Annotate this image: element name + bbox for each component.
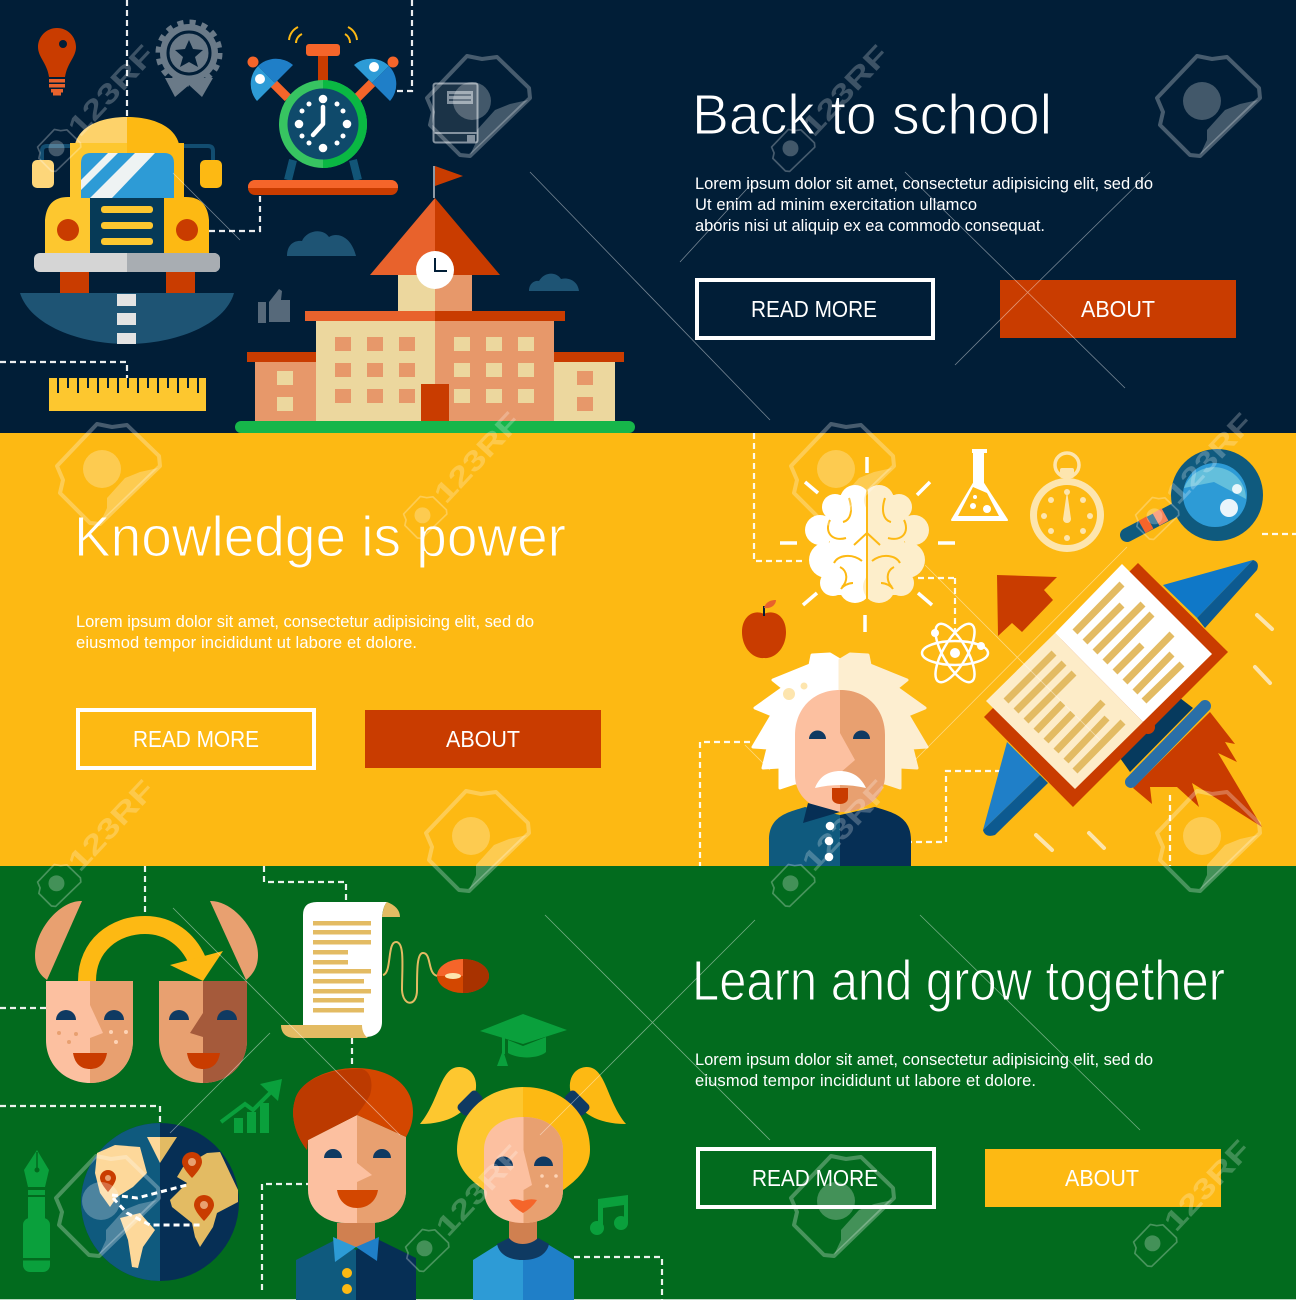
icon: clouds [287, 231, 579, 291]
watermark text: 123RF [1160, 407, 1259, 510]
icon: brain [780, 457, 955, 632]
icon: globe [81, 1123, 239, 1281]
icon: document scroll [281, 902, 400, 1038]
panel: back to school [0, 0, 1296, 433]
button: read more [698, 1149, 934, 1207]
icon: up arrow [997, 575, 1057, 636]
button: read more: READ MORE [133, 726, 259, 752]
icon: ruler [49, 378, 206, 411]
watermark text: 123RF [428, 406, 527, 509]
heading: back to school: Back to school [692, 83, 1052, 147]
icon: comedy and tragedy masks [35, 901, 258, 1083]
icon: flask [952, 449, 1007, 520]
button: about [365, 710, 601, 768]
icon: thumbs up [258, 289, 290, 323]
illustration: boy [293, 1068, 416, 1300]
icon: fountain pen [23, 1150, 50, 1272]
button: read more [697, 280, 933, 338]
button: read more: READ MORE [751, 296, 877, 322]
icon: music note heads [590, 1216, 628, 1235]
watermark text: 123RF [1158, 1134, 1257, 1237]
icon: mouse [383, 942, 489, 1003]
icon: award rosette [158, 22, 220, 97]
watermark text: 123RF [796, 39, 895, 142]
text block: knowledge is power: eiusmod tempor incididunt ut labore et dolore. [76, 634, 417, 652]
icon: alarm clock [248, 27, 398, 195]
icon: magnifying glass [1127, 449, 1263, 541]
text block: back to school: Ut enim ad minim exercitation ullamco [695, 196, 977, 214]
button: about: ABOUT [446, 726, 520, 752]
watermark text: 123RF [62, 39, 161, 142]
illustration: school building [235, 166, 635, 433]
text block: back to school: aboris nisi ut aliquip ex ea commodo consequat. [695, 217, 1045, 235]
icon: stopwatch [1030, 453, 1104, 552]
watermark text: 123RF [62, 774, 161, 877]
button: about: ABOUT [1065, 1165, 1139, 1191]
icon: music note [598, 1195, 628, 1228]
icon: graduation cap [480, 1014, 567, 1066]
text block: knowledge is power: Lorem ipsum dolor sit amet, consectetur adipisicing elit, sed do [76, 613, 534, 631]
button: read more [78, 710, 314, 768]
heading: learn and grow together: Learn and grow together [692, 949, 1225, 1013]
watermark text: 123RF [796, 774, 895, 877]
icon: growth chart [221, 1079, 282, 1133]
icon: school bus [20, 117, 234, 344]
illustration: einstein [753, 654, 927, 866]
illustration: girl [420, 1067, 626, 1300]
text block: learn and grow together: Lorem ipsum dolor sit amet, consectetur adipisicing elit, sed do [695, 1051, 1153, 1069]
panel: learn and grow together [0, 866, 1296, 1300]
button: read more: READ MORE [752, 1165, 878, 1191]
illustration: book rocket [983, 560, 1272, 850]
text block: back to school: Lorem ipsum dolor sit amet, consectetur adipisicing elit, sed do [695, 175, 1153, 193]
button: about: ABOUT [1081, 296, 1155, 322]
watermark text: 123RF [430, 1139, 529, 1242]
button: about [1000, 280, 1236, 338]
icon: book [434, 84, 478, 143]
text block: learn and grow together: eiusmod tempor incididunt ut labore et dolore. [695, 1072, 1036, 1090]
icon: apple [742, 600, 786, 658]
heading: knowledge is power: Knowledge is power [74, 505, 566, 569]
icon: light bulb [38, 28, 76, 96]
button: about [985, 1149, 1221, 1207]
panel: knowledge is power [0, 433, 1296, 866]
small watermark logos [38, 129, 1179, 1271]
icon: atom [922, 618, 988, 688]
